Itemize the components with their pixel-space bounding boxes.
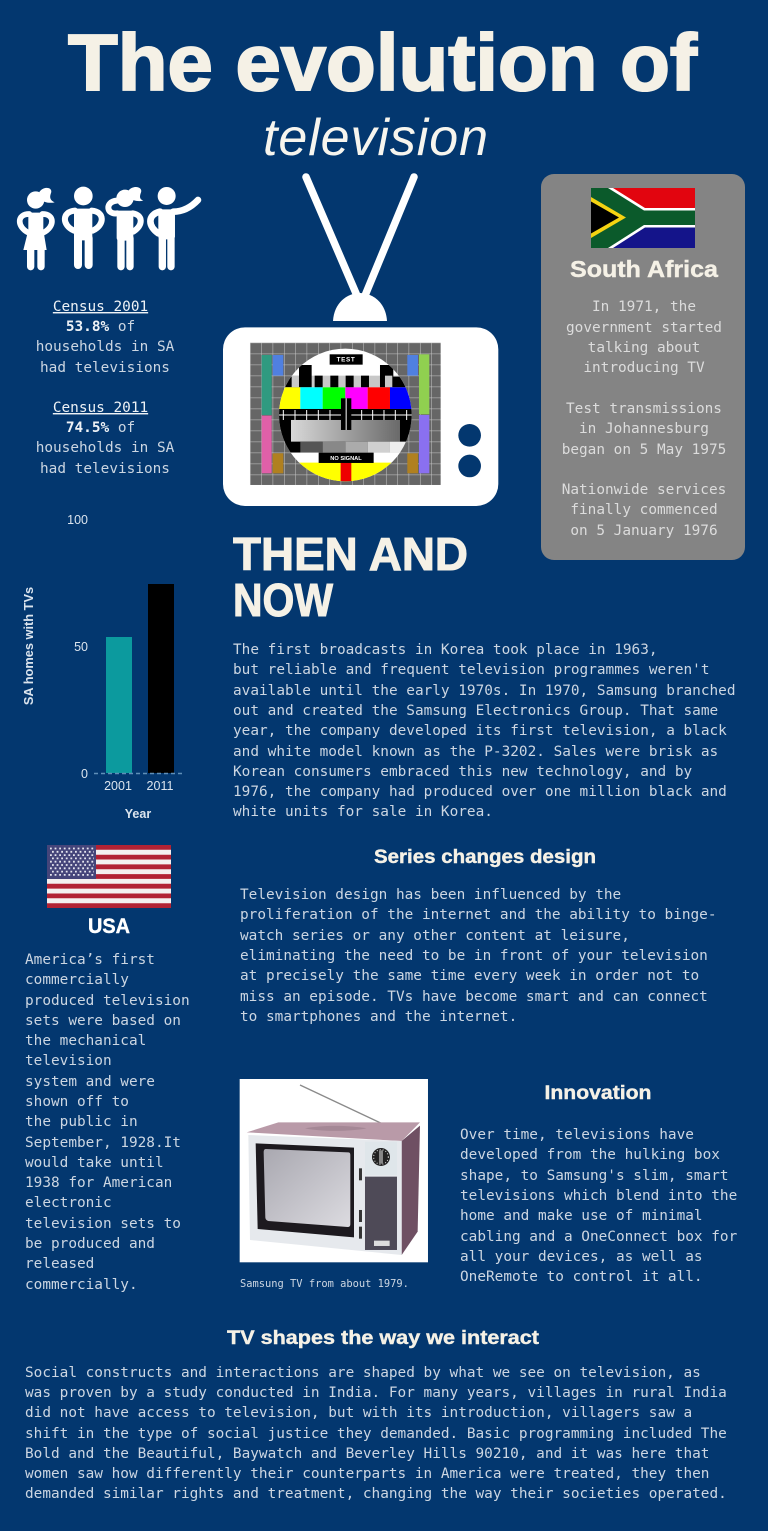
text: innovation: all your devices, as well as [460, 1249, 703, 1265]
test card [250, 343, 441, 485]
photo caption: Samsung TV from about 1979. [240, 1278, 409, 1290]
text: innovation: televisions which blend into the [460, 1188, 737, 1204]
text: then and now: Korean consumers embraced this new technology, and by [233, 764, 693, 780]
USA text [25, 952, 190, 1293]
South Africa text: introducing TV [583, 360, 705, 376]
text: TV shapes the way we interact [25, 1365, 727, 1502]
text: innovation: Over time, televisions have [460, 1127, 694, 1143]
USA text: would take until [25, 1155, 164, 1171]
census text: Census 2011 [53, 400, 148, 416]
South Africa text: began on 5 May 1975 [562, 442, 726, 458]
buttons [458, 424, 481, 477]
test card: NO SIGNAL [330, 456, 362, 462]
USA text: commercially. [25, 1277, 138, 1293]
heading: then and now [233, 528, 468, 626]
South Africa text: Test transmissions [566, 401, 722, 417]
script subtitle: television [263, 109, 488, 167]
text: TV shapes the way we interact: did not have access to television, but with its introduction, villagers saw a [25, 1405, 692, 1421]
text: TV shapes the way we interact: was proven by a study conducted in India. For many years, villages in rural India [25, 1385, 727, 1401]
person 1 [20, 188, 55, 267]
bar chart: 2001 [104, 779, 132, 793]
text: innovation: OneRemote to control it all. [460, 1269, 703, 1285]
text: then and now: and white model known as the P-3202. Sales were brisk as [233, 744, 718, 760]
USA text: television sets to [25, 1216, 181, 1232]
text: series changes design: Television design has been influenced by the [240, 887, 621, 903]
text: then and now [233, 642, 736, 820]
bar chart: 100 [67, 513, 88, 527]
USA text: produced television [25, 993, 190, 1009]
USA flag [47, 845, 171, 908]
census text [36, 299, 175, 477]
South Africa text: In 1971, the [592, 299, 696, 315]
South Africa text: finally commenced [570, 502, 718, 518]
USA text: the public in [25, 1114, 138, 1130]
census text: had televisions [40, 360, 170, 376]
USA text: America’s first [25, 952, 155, 968]
USA text: television [25, 1053, 112, 1069]
census text: households in SA [36, 440, 175, 456]
USA text: electronic [25, 1195, 112, 1211]
South Africa text [562, 299, 726, 539]
South Africa flag [591, 188, 695, 248]
person 4 [150, 187, 198, 267]
bar chart: 50 [74, 640, 88, 654]
census text: households in SA [36, 339, 175, 355]
text: series changes design: at precisely the same time every week in order not to [240, 968, 699, 984]
text: TV shapes the way we interact: demanded similar rights and treatment, changing the way their societies operated. [25, 1486, 727, 1502]
USA text: released [25, 1256, 94, 1272]
census text: had televisions [40, 461, 170, 477]
icon: four people [20, 187, 198, 267]
text: series changes design: miss an episode. TVs have become smart and can connect [240, 989, 708, 1005]
test card: TEST [337, 357, 355, 364]
census text: Census 2001 [53, 299, 148, 315]
heading: then and now: THEN AND [233, 528, 468, 580]
text: series changes design: to smartphones and the internet. [240, 1009, 517, 1025]
USA text: 1938 for American [25, 1175, 172, 1191]
USA text: the mechanical [25, 1033, 146, 1049]
bar chart [21, 513, 184, 821]
text: innovation [460, 1127, 738, 1285]
heading: TV shapes the way we interact: TV shapes the way we interact [227, 1328, 540, 1349]
text: then and now: available until the early 1970s. In 1970, Samsung branched [233, 683, 736, 699]
census text: 53.8% of [66, 319, 135, 335]
bar chart: 0 [81, 767, 88, 781]
South Africa text: on 5 January 1976 [570, 523, 718, 539]
person 2 [65, 187, 102, 265]
text: innovation: shape, to Samsung's slim, smart [460, 1168, 729, 1184]
USA text: commercially [25, 972, 129, 988]
text: then and now: white units for sale in Korea. [233, 804, 493, 820]
text: then and now: 1976, the company had produced over one million black and [233, 784, 727, 800]
heading: innovation: Innovation [544, 1083, 652, 1104]
text: then and now: year, the company developed its first television, a black [233, 723, 727, 739]
South Africa text: Nationwide services [562, 482, 726, 498]
USA text: be produced and [25, 1236, 155, 1252]
text: innovation: home and make use of minimal [460, 1208, 703, 1224]
text: then and now: The first broadcasts in Korea took place in 1963, [233, 642, 658, 658]
heading: then and now: NOW [233, 574, 334, 626]
USA text: September, 1928.It [25, 1135, 181, 1151]
heading: series changes design: Series changes design [374, 847, 596, 868]
South Africa text: government started [566, 320, 722, 336]
bar chart: Year [125, 807, 151, 821]
panel: South Africa [541, 174, 745, 560]
person 3 [108, 187, 143, 267]
census text: 74.5% of [66, 420, 135, 436]
title: The evolution of [68, 18, 697, 107]
text: series changes design: watch series or any other content at leisure, [240, 928, 630, 944]
South Africa text: in Johannesburg [579, 421, 709, 437]
USA text: sets were based on [25, 1013, 181, 1029]
USA text: shown off to [25, 1094, 129, 1110]
text: series changes design: eliminating the need to be in front of your television [240, 948, 708, 964]
icon: television set [223, 327, 498, 506]
text: TV shapes the way we interact: Social constructs and interactions are shaped by what we see on television, as [25, 1365, 701, 1381]
text: series changes design: proliferation of the internet and the ability to binge- [240, 907, 717, 923]
text: then and now: out and created the Samsung Electronics Group. That same [233, 703, 718, 719]
bar chart: 2011 [147, 779, 173, 793]
South Africa heading: South Africa [570, 256, 718, 282]
photo: vintage Samsung TV [240, 1079, 428, 1262]
USA text: system and were [25, 1074, 155, 1090]
icon: antenna [306, 177, 414, 321]
text: then and now: but reliable and frequent television programmes weren't [233, 662, 710, 678]
text: innovation: developed from the hulking box [460, 1147, 720, 1163]
South Africa text: talking about [588, 340, 700, 356]
text: innovation: cabling and a OneConnect box for [460, 1229, 738, 1245]
text: TV shapes the way we interact: women saw how differently their counterparts in America were treated, they then [25, 1466, 709, 1482]
text: TV shapes the way we interact: shift in the type of social justice they demanded. Basic programming included The [25, 1426, 727, 1442]
bar chart: SA homes with TVs [21, 587, 36, 705]
USA heading: USA [88, 915, 130, 938]
text: series changes design [240, 887, 717, 1025]
text: TV shapes the way we interact: Bold and the Beautiful, Baywatch and Beverley Hills 90210, and it was here that [25, 1446, 709, 1462]
